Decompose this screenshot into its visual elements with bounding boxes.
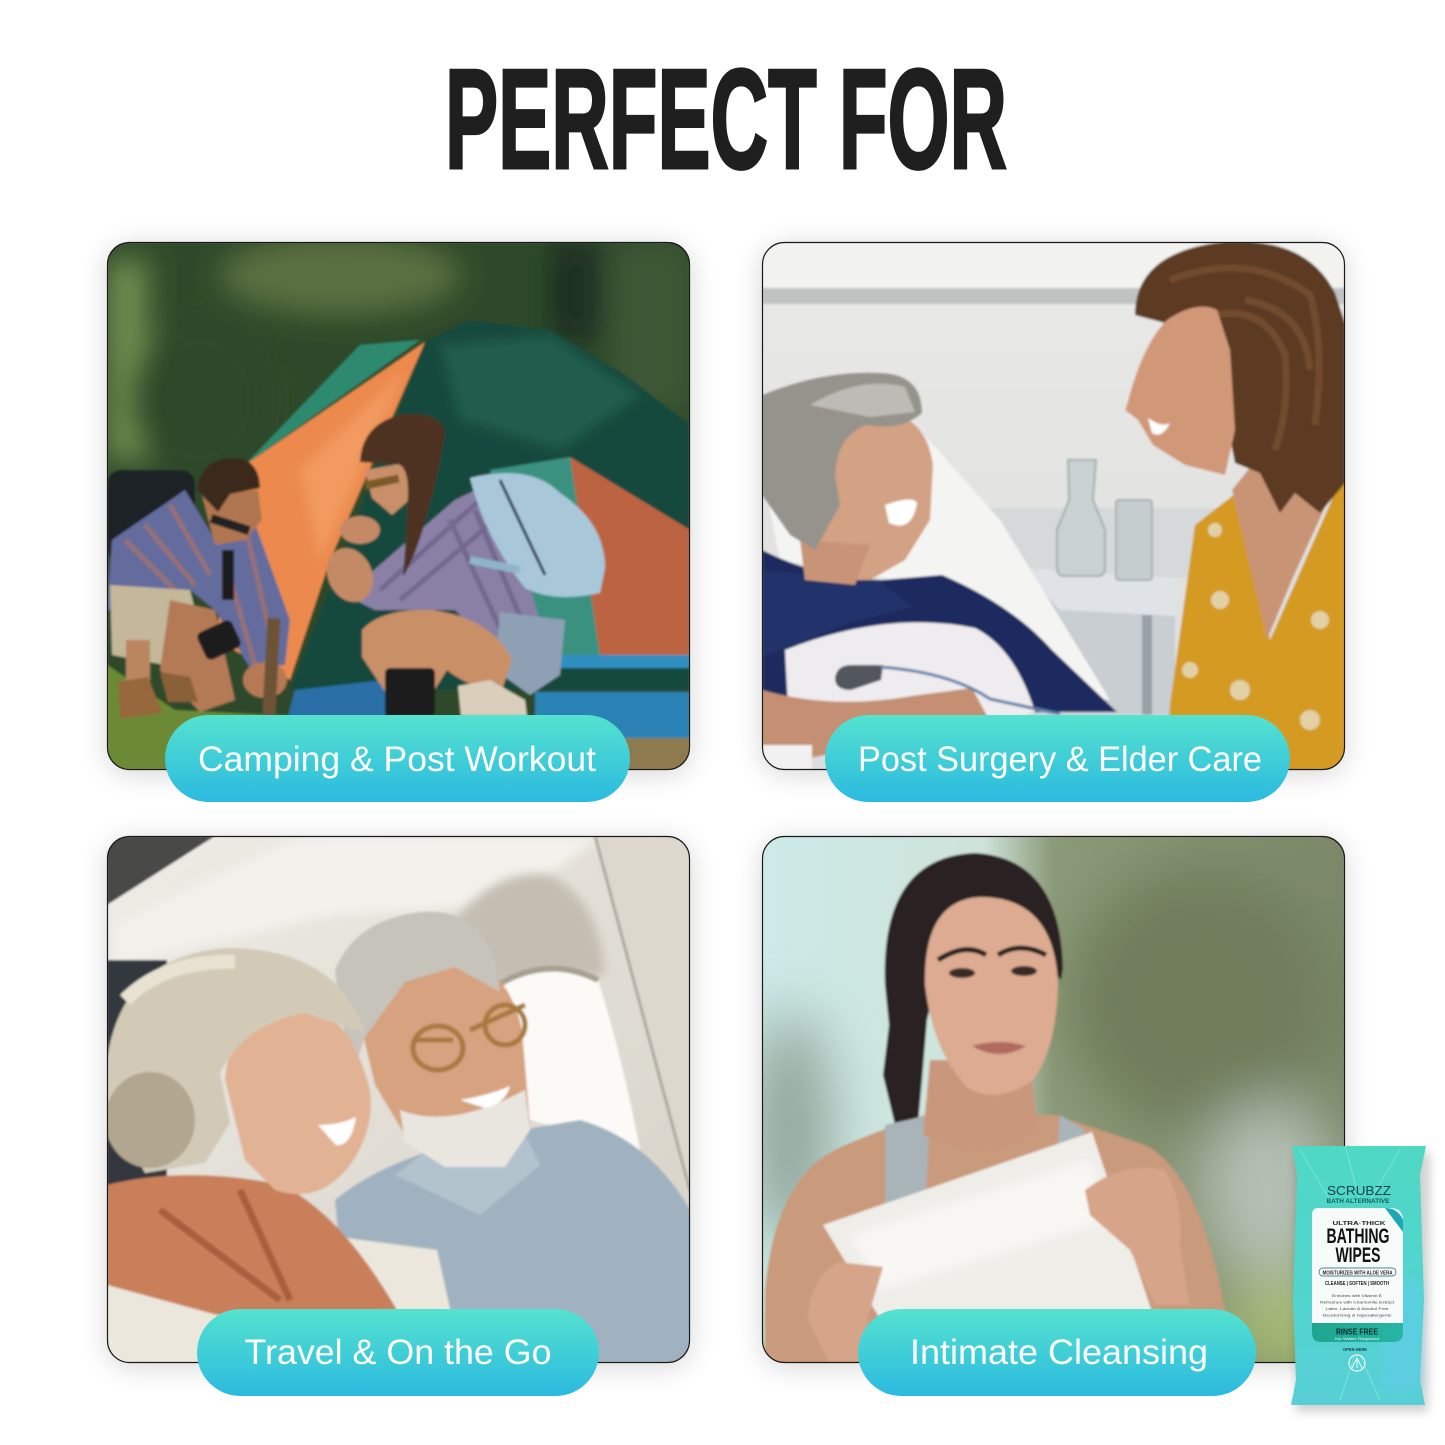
woman: [765, 853, 1230, 1370]
photo: couple on an airplane: [105, 836, 690, 1363]
label: CLEANSE | SOFTEN | SMOOTH: [1325, 1281, 1389, 1287]
label: No Water Required: [1335, 1336, 1379, 1341]
label: BATHING: [1326, 1225, 1390, 1248]
border: [108, 242, 690, 770]
carafe and glass: [1057, 460, 1152, 580]
photo: elderly patient and caregiver: [762, 242, 1345, 775]
brand: SCRUBZZ: [1327, 1184, 1391, 1198]
caregiver dress: [1165, 470, 1345, 770]
pill label: [858, 1309, 1256, 1396]
wipe: [823, 1132, 1152, 1322]
patient: [762, 373, 1117, 775]
border: [762, 836, 1344, 1362]
label: RINSE FREE: [1336, 1326, 1378, 1336]
label: [1312, 1208, 1403, 1342]
label: WIPES: [1336, 1244, 1380, 1267]
tent: green dome: [290, 320, 690, 690]
caregiver face: [1125, 307, 1235, 475]
hands: [808, 1262, 883, 1362]
title: PERFECT FOR: [445, 40, 1007, 199]
caregiver skin: [1231, 467, 1326, 640]
pill label: Travel & On the Go: [244, 1333, 552, 1372]
tent: orange panel: [215, 342, 425, 680]
pill label: Post Surgery & Elder Care: [858, 740, 1262, 779]
panel: intimate cleansing: [750, 836, 1350, 1396]
woman: [318, 414, 605, 716]
man: [335, 912, 690, 1363]
panel: travel and on the go: [105, 836, 690, 1396]
product: bathing wipes pack: OPEN HERE: [1343, 1347, 1367, 1352]
label: Latex, Lanolin & Alcohol Free: [1326, 1306, 1389, 1311]
pill label: [825, 715, 1290, 802]
label: Enriches with Vitamin E: [1332, 1293, 1382, 1298]
label: Deodorizing & Hypoallergenic: [1322, 1312, 1392, 1318]
window: [498, 969, 640, 1150]
pillow: [762, 430, 1110, 700]
pill label: [197, 1309, 599, 1396]
panel: camping and post workout: [107, 235, 690, 802]
card shadows: [107, 246, 1345, 1367]
label: ULTRA·THICK: [1332, 1221, 1386, 1227]
pill label: Intimate Cleansing: [910, 1333, 1208, 1372]
photo: woman holding a white wipe: [750, 836, 1350, 1370]
label: MOISTURIZES WITH ALOE VERA: [1322, 1270, 1393, 1276]
border: [108, 836, 690, 1362]
photo: couple pitching a tent: [107, 235, 690, 770]
tent: blue base: [288, 680, 385, 716]
woman: [105, 948, 462, 1363]
tent: entrance and rain fly: [489, 456, 601, 656]
caregiver curly hair: [1135, 242, 1345, 513]
man: [107, 458, 290, 719]
product: bathing wipes pack: BATH ALTERNATIVE: [1326, 1198, 1390, 1205]
border: [762, 242, 1344, 770]
ground: [107, 665, 290, 770]
pill label: [165, 715, 630, 802]
bedside table: [1030, 598, 1176, 715]
label: Refreshes with Chamomile Extract: [1320, 1300, 1395, 1304]
product: bathing wipes pack: [1291, 1146, 1430, 1412]
pill label: Camping & Post Workout: [198, 740, 596, 779]
panel: post surgery and elder care: [762, 242, 1345, 802]
